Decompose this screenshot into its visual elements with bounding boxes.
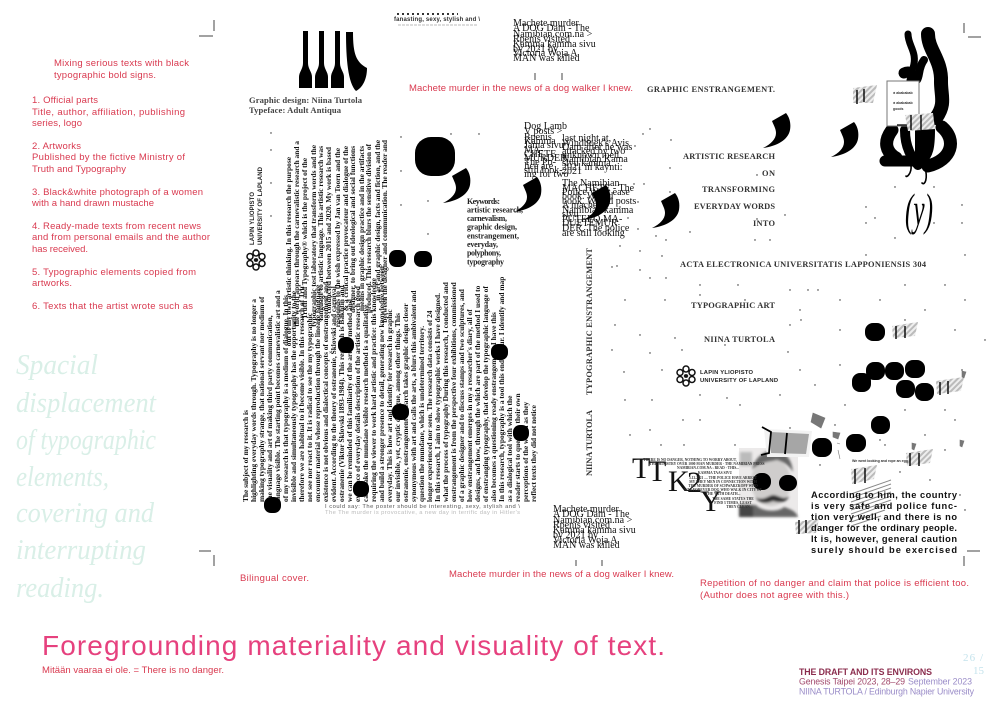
footer credits <box>799 667 975 696</box>
ready-made news block: centre left: Dog Lamb <box>524 121 567 132</box>
rotated essay text, lower column: everyday. This is how art and identity for research in graphic <box>385 309 394 502</box>
ready-made news block: top: by 2021 by <box>513 44 558 55</box>
tiny centred ready-made text: NAMIBIAN.COM.NA › READ · THIS... <box>677 466 739 470</box>
footer credits: THE DRAFT AND ITS ENVIRONS <box>799 667 932 677</box>
keywords: polyphony, <box>467 248 501 258</box>
ready-made news block: centre left: lice are <box>524 161 554 172</box>
left notes: Truth and Typography <box>32 164 126 175</box>
ready-made news block: centre right <box>562 133 636 239</box>
ready-made news block: bottom: by 2021 by <box>553 530 598 541</box>
crop-mark-adjacent tiny overprint line at top: fanasting, sexy, stylish and \ <box>394 17 480 23</box>
left notes: with a hand drawn mustache <box>31 198 154 209</box>
rotated essay text, lower column: language visible. The starting point becomes carnevalistic art and a <box>273 290 282 502</box>
rotated essay text, upper column: language to artistic language. This artistic research was <box>316 146 325 320</box>
ready-made news block: centre left <box>524 121 568 180</box>
left notes: and from personal emails and the author <box>32 232 210 243</box>
rotated essay text, lower column: invisible and simultaneously typography has the opportunity to the <box>289 290 298 502</box>
rotated essay text, lower column: designs, and how, through the which are part of the method I used to <box>473 285 482 502</box>
paragraph: according to him: tion very well, and there is no <box>811 512 957 522</box>
page number <box>963 652 984 677</box>
footer credits: September 2023 <box>908 676 972 686</box>
left notes: 4. Ready-made texts from recent news <box>32 221 201 232</box>
small framed poster: ♣ abababab <box>893 91 913 95</box>
ready-made news block: top: A DOG Dam - The <box>513 23 590 34</box>
spine text: TYPOGRAPHIC ENSTRANGEMENT <box>585 248 594 395</box>
hatched N marks <box>795 85 964 534</box>
ready-made news block: centre right: Namibian kamma <box>562 205 634 216</box>
ready-made news block: top: Kamma kamma sivu <box>513 39 596 50</box>
ready-made news block: centre right: last night at, <box>562 133 611 144</box>
keywords: graphic design, <box>467 222 517 232</box>
spine text: NIINA TURTOLA <box>585 410 594 476</box>
ready-made news block: bottom: Kamma kamma sivu <box>553 525 636 536</box>
tiny centred ready-made text: KAMMA TAAS SIVU <box>698 471 733 475</box>
logo: horizontal Lapland <box>677 366 778 386</box>
rotated essay text, upper column: in art and graphic design, facts and fiction, and the <box>373 139 382 301</box>
rotated essay text, lower column: therefore we are habitual to it become visible. In this research of Tru <box>297 286 306 502</box>
rotated essay text, lower column: of enstranging typography, that develop the typographic language of <box>481 286 490 502</box>
tiny centred ready-made text <box>643 458 764 509</box>
left notes: typographic bold signs. <box>54 70 156 81</box>
overprint line below the essay <box>325 504 520 516</box>
credits: graphic design and typeface <box>249 95 363 115</box>
left notes: artworks. <box>32 278 72 289</box>
ready-made news block: centre left: MURDER <box>524 153 567 164</box>
artwork: parenthesised y: (y) <box>905 184 933 235</box>
paragraph: according to him: surely should be exercised <box>811 545 957 555</box>
ready-made news block: bottom <box>553 504 636 551</box>
rotated essay text, upper column: out of my own artistic thinking. In this research the purpose <box>284 156 293 346</box>
heading: spacial displacement: interrupting <box>16 534 146 566</box>
small framed poster <box>887 81 919 126</box>
left notes: 6. Texts that the artist wrote such as <box>32 301 193 312</box>
rotated essay text, lower column: reader starts to question their own <box>513 393 522 502</box>
rotated essay text, lower column: making typography strange, that national servant nor medium of <box>257 296 266 502</box>
big comma <box>415 137 470 203</box>
rotated essay text, lower column: In this research, I aim to show typographic works I have designed. <box>433 293 442 502</box>
rotated essay text, upper column: designer, to bring out ideological and social functions <box>348 146 357 313</box>
ready-made news block: centre right: MACHETE - The <box>562 183 635 194</box>
rotated essay text, lower column: and build a stronger presence to detail, generating new knowledge between <box>377 266 386 502</box>
hand-drawn swirl artwork <box>885 34 950 184</box>
typographic stack TTK2Y: T <box>632 452 650 485</box>
artwork: fork glyphs <box>299 31 367 91</box>
left notes: 2. Artworks <box>32 141 81 152</box>
page number: 26 / <box>963 652 984 664</box>
title lines, right column: ACTA ELECTRONICA UNIVERSITATIS LAPPONIENSIS 304 <box>680 260 927 269</box>
small framed poster: ♣ abababab <box>893 101 913 105</box>
page number: 15 <box>973 665 984 677</box>
ready-made news block: centre left: MA- <box>524 145 543 156</box>
rotated essay text, lower column: evident. According to the theory of ostranenie, Šklovski and carnival <box>328 286 338 502</box>
overprint line below the essay: The The murder is provocative, a new day in terrific day in Hitler's <box>325 510 520 516</box>
paragraph: according to him: According to him, the country <box>811 490 958 500</box>
keywords: carnevalism, <box>467 214 507 223</box>
rotated essay text, upper column: Truth and Typography® which is the project of the <box>300 157 309 319</box>
heading: spacial displacement: covering and <box>16 497 154 529</box>
tiny centred ready-made text: THE SAME STATUS THE <box>712 497 754 501</box>
rotated essay text, lower column: ostranenie (Viktor Šklovski 1893-1984). This research is Bakhtin and <box>336 284 346 502</box>
heading: spacial displacement: reading. <box>16 572 104 604</box>
rotated essay text, lower column: The subject of my research is <box>241 410 250 502</box>
comma glyphs row <box>514 113 858 228</box>
spine text <box>585 248 594 476</box>
caption: repetition of no danger: Repetition of no danger and claim that police is efficient too. <box>700 578 969 589</box>
ready-made news block: centre right: A machete <box>562 200 605 211</box>
rotated essay text, lower column: the visuality and art of making third party communication, <box>265 315 274 502</box>
rotated essay text, upper column: means in graphic design practice and in the artifacts <box>357 146 366 311</box>
title lines, right column: INTO <box>753 219 775 228</box>
caption: machete murder bottom: Machete murder in the news of a dog walker I knew. <box>449 569 674 580</box>
title lines, right column: GRAPHIC ENSTRANGEMENT. <box>647 85 775 94</box>
rotated essay text, upper column <box>284 139 389 346</box>
left notes: series, logo <box>32 118 82 129</box>
rotated essay text, lower column: our invisible, yet, cryptic dialogue, among other things. This <box>393 313 402 502</box>
ready-made news block: top: MAN was killed <box>513 53 580 64</box>
rotated essay text, lower column: existence is not obvious and dialectical concepts of enstrangement and <box>321 281 330 502</box>
ready-made news block: centre right: Dam after he was <box>562 142 632 153</box>
left notes: 3. Black&white photograph of a women <box>32 187 203 198</box>
left notes: Mixing serious texts with black <box>54 58 189 69</box>
tiny centred ready-made text: FIND 3 TIMES, LEAST <box>714 501 752 505</box>
caption: machete murder top: Machete murder in the news of a dog walker I knew. <box>409 83 633 94</box>
rotated essay text, lower column: also becomes a questioning ready enstrangement. I have this <box>489 312 498 502</box>
tiny centred ready-made text: THEY CLEAN <box>726 505 750 509</box>
rotated essay text, lower column: as a dialogical tool with which the <box>505 395 514 502</box>
ready-made news block: centre right: PUTEEQ MA- <box>562 214 622 225</box>
logo: horizontal Lapland: UNIVERSITY OF LAPLAND <box>700 378 778 384</box>
rotated essay text, lower column: of my research is that typography is a medium of dialogue. In this <box>281 295 290 502</box>
rotated essay text, lower column: highlighting everyday words through. Typography is no longer a <box>249 299 258 502</box>
rotated essay text, lower column: ostranenie, enstrangement research takes graphic design closer <box>401 303 410 502</box>
rotated essay text, lower column: we can be reminded of this familiarity of the artistic method and <box>345 298 354 502</box>
rotated essay text, lower column: perceptions of the world as they <box>521 401 530 502</box>
tiny centred ready-made text: 5.12.2021 — THE POLICE HAVE ARREST <box>689 476 758 480</box>
main heading: Foregrounding materiality and visuality of text. <box>42 630 665 661</box>
keywords: typography <box>467 258 504 266</box>
ready-made news block: centre left: Jama sivu <box>524 140 564 151</box>
rotated essay text, upper column: produced. This research blurs the sensitive division of <box>364 143 373 313</box>
ready-made news block: centre right: Windhoek's Avis <box>562 138 629 149</box>
ready-made news block: bottom: Rpenis visited <box>553 520 610 531</box>
heading: spacial displacement: elements, <box>16 461 109 493</box>
ready-made news block: centre right: 2021 in kaynti: <box>562 162 623 173</box>
rotated essay text, lower column: reflect texts they did not notice <box>529 404 538 502</box>
left notes: 5. Typographic elements copied from <box>32 267 196 278</box>
ready-made news block: centre left: Kamma <box>524 136 556 147</box>
paragraph: according to him: It is, however, general caution <box>811 534 957 544</box>
tiny centred ready-made text: WAS FOREVER DOG WHO WALK IN CITY OF <box>684 488 763 492</box>
left notes <box>31 58 210 312</box>
credits: graphic design and typeface: Graphic design: Niina Turtola <box>249 95 363 105</box>
logo: vertical Lapland: LAPIN YLIOPISTO <box>250 192 256 245</box>
ready-made news block: centre right: sivu <box>562 209 579 220</box>
ready-made news block: centre left: The Po- <box>524 157 556 168</box>
ready-made news block: bottom: Namibian.com.na > <box>553 515 633 526</box>
caption: repetition of no danger: (Author does not agree with this.) <box>700 590 849 601</box>
typographic stack TTK2Y: 2 <box>687 466 702 499</box>
keywords: everyday, <box>467 240 498 249</box>
heading: spacial displacement <box>16 349 157 604</box>
tiny centred ready-made text: THE MINISTRY OVER 1000 MAN MURDER - THE NAMIBIAN PRESS <box>650 462 764 466</box>
ready-made news block: centre right: Police Wear ease <box>562 187 630 198</box>
ready-made news block: bottom: Victoria Woja A <box>553 535 618 546</box>
ready-made news block: centre right: are still looking <box>562 228 625 239</box>
rotated essay text, lower column: encounter material whose reproduction through the lineage language <box>313 284 322 502</box>
typographic stack TTK2Y: T <box>648 455 666 488</box>
keywords <box>467 197 523 266</box>
ready-made news block: centre right: Namibian Kama <box>562 154 628 165</box>
ready-made news block: bottom: MAN was killed <box>553 540 620 551</box>
ready-made news block: centre left: Rpenis <box>524 132 552 143</box>
heading: spacial displacement: Spacial <box>16 349 98 381</box>
rotated essay text, lower column: question the mundane, which is undetermined territory. <box>417 326 426 502</box>
small framed poster: goods <box>893 107 904 111</box>
rotated essay text, lower column: synonymous with art and calls the arts, a blurs this ambivalent and <box>409 290 418 502</box>
rotated essay text, lower column: In this research, typography is a tool this endeavour. I identify and map <box>497 277 506 502</box>
title lines, right column: ARTISTIC RESEARCH <box>683 152 775 161</box>
ready-made news block: centre right: DUETEMUR <box>562 218 618 229</box>
rotated essay text, lower column: existence of everyday details description of the artistic research good <box>353 285 362 502</box>
logo: vertical Lapland <box>247 166 265 270</box>
title lines, right column <box>647 85 927 344</box>
rotated essay text, lower column: longer experienced nor seen. The research data consists of 24 <box>425 310 434 502</box>
rotated essay text, lower column: enstrangement is from the perspective four exhibitions, commissioned <box>449 281 458 502</box>
ready-made news block: bottom: A DOG Dam - The <box>553 509 630 520</box>
ready-made news block: centre left: CHETE <box>524 149 556 160</box>
heading: spacial displacement: of typographic <box>16 424 156 456</box>
tiny centred ready-made text: THERE IS NO DANGER, NOTHING TO WORRY ABOUT, <box>643 458 737 462</box>
caption: bilingual cover: Bilingual cover. <box>240 573 309 584</box>
keywords: Keywords: <box>467 197 500 206</box>
typographic stack TTK2Y: Y <box>700 485 722 518</box>
paragraph: according to him <box>811 490 958 555</box>
heading: spacial displacement: displacement <box>16 387 157 419</box>
small overprint sentence: We went looking and rope an egg <box>852 459 908 463</box>
photo overlay: black sunglasses dots <box>753 473 797 491</box>
photograph: woman with hand-drawn mustache <box>739 448 798 517</box>
rotated essay text, upper column: the world appears through the carnevalistic research and a <box>292 141 301 327</box>
tiny centred ready-made text: THE MURDER OF SCHWARZKOPF WHO <box>688 484 758 488</box>
rotated essay text, lower column: can make the mundane visible research method is a qualitative <box>361 304 370 502</box>
tiny centred ready-made text: THE WITH DEATH... <box>706 492 740 496</box>
crop-mark-adjacent tiny overprint line at top <box>394 14 480 25</box>
rotated essay text, upper column: conducted between 2015 and 2020. My work is based <box>324 146 333 314</box>
keywords: artistic research, <box>467 206 523 214</box>
title lines, right column: NIINA TURTOLA <box>704 335 775 344</box>
hatched text behind the paragraph <box>851 480 891 526</box>
rotated essay text, lower column: what the process of typography During this research, I conducted and <box>441 281 450 502</box>
ready-made news block: top: Victoria Woja A <box>513 48 578 59</box>
ready-made news block: centre right: book. Would <box>562 191 613 202</box>
rotated essay text, lower column: not see nor react to it. It is radical to see the my typographic <box>305 312 314 502</box>
rotated essay text, upper column: responds to the wish expressed by Jan van Toorn and the <box>333 147 342 327</box>
tiny centred ready-made text: MY THEY MEN IN CONNECTION WITH <box>689 480 757 484</box>
rotated essay text, lower column: how enstrangement emerges in my a researcher's diary, all of <box>465 309 474 502</box>
ready-made news block: centre right: sivu kamma <box>562 158 611 169</box>
title lines, right column: TRANSFORMING <box>702 185 775 194</box>
ready-made news block: top: Namibian.com.na > <box>513 29 593 40</box>
subtitle: Mitään vaaraa ei ole. = There is no danger. <box>42 665 224 676</box>
ready-made news block: centre left: V posts > <box>524 126 563 137</box>
paragraph: according to him: is very safe and police func- <box>811 501 957 511</box>
ready-made news block: centre right: attacked by two <box>562 146 625 157</box>
left notes: Title, author, affiliation, publishing <box>32 107 185 118</box>
ready-made news block: centre right: book. Would posts <box>562 196 636 207</box>
paragraph: according to him: danger for the ordinary people. <box>811 523 957 533</box>
title lines, right column: TYPOGRAPHIC ART <box>691 301 775 310</box>
typographic stack TTK2Y: K <box>668 465 690 498</box>
rotated essay text, lower column <box>241 266 538 502</box>
overprint line below the essay: I could say: The poster should be interesting, sexy, stylish and \ <box>325 504 520 510</box>
ready-made news block: top: Rpenis visited <box>513 34 570 45</box>
caption: repetition of no danger <box>700 578 969 601</box>
rotated essay text, upper column: & a critical practice provocateur and dialogue of the <box>341 145 350 311</box>
logo: horizontal Lapland: LAPIN YLIOPISTO <box>700 370 753 376</box>
ready-made news block: centre right: DER, The police <box>562 223 630 234</box>
footer credits: NIINA TURTOLA / Edinburgh Napier University <box>799 686 975 696</box>
left notes: has received. <box>32 244 88 255</box>
rotated essay text, upper column: typographic test laboratory that transform words and the <box>309 144 318 327</box>
logo: vertical Lapland: UNIVERSITY OF LAPLAND <box>258 166 264 245</box>
typographic stack TTK2Y <box>632 452 722 518</box>
keywords: enstrangement, <box>467 232 519 240</box>
ready-made news block: centre right: unknown men. <box>562 150 621 161</box>
left notes: Published by the fictive Ministry of <box>32 152 185 163</box>
rotated essay text, lower column: requiring the viewer to work hard artistic and practice: this knowledge <box>369 277 378 502</box>
title lines, right column: ON <box>762 169 775 178</box>
ready-made news block: centre right: 2021 <box>562 166 582 177</box>
ready-made news block: bottom: Machete murder <box>553 504 619 515</box>
credits: graphic design and typeface: Typeface: Adult Antiqua <box>249 105 342 115</box>
rotated essay text, upper column: between the designer and communication. The reader and <box>380 139 389 323</box>
ready-made news block: top: Machete murder <box>513 18 579 29</box>
ready-made news block: centre left: still look- <box>524 165 563 176</box>
rotated essay text, lower column: of a graphic designer and to discuss stamps and two sculptures, and <box>457 288 466 502</box>
footer credits: Genesis Taipei 2023, 28–29 <box>799 676 905 686</box>
ready-made news block: top <box>513 18 596 64</box>
title lines, right column: EVERYDAY WORDS <box>694 202 775 211</box>
ready-made news block: centre left: ing for two <box>524 169 568 180</box>
left notes: 1. Official parts <box>32 95 98 106</box>
large grey N artwork <box>761 371 966 459</box>
black round blobs <box>264 250 934 513</box>
ready-made news block: centre right: The Namibian <box>562 178 619 189</box>
